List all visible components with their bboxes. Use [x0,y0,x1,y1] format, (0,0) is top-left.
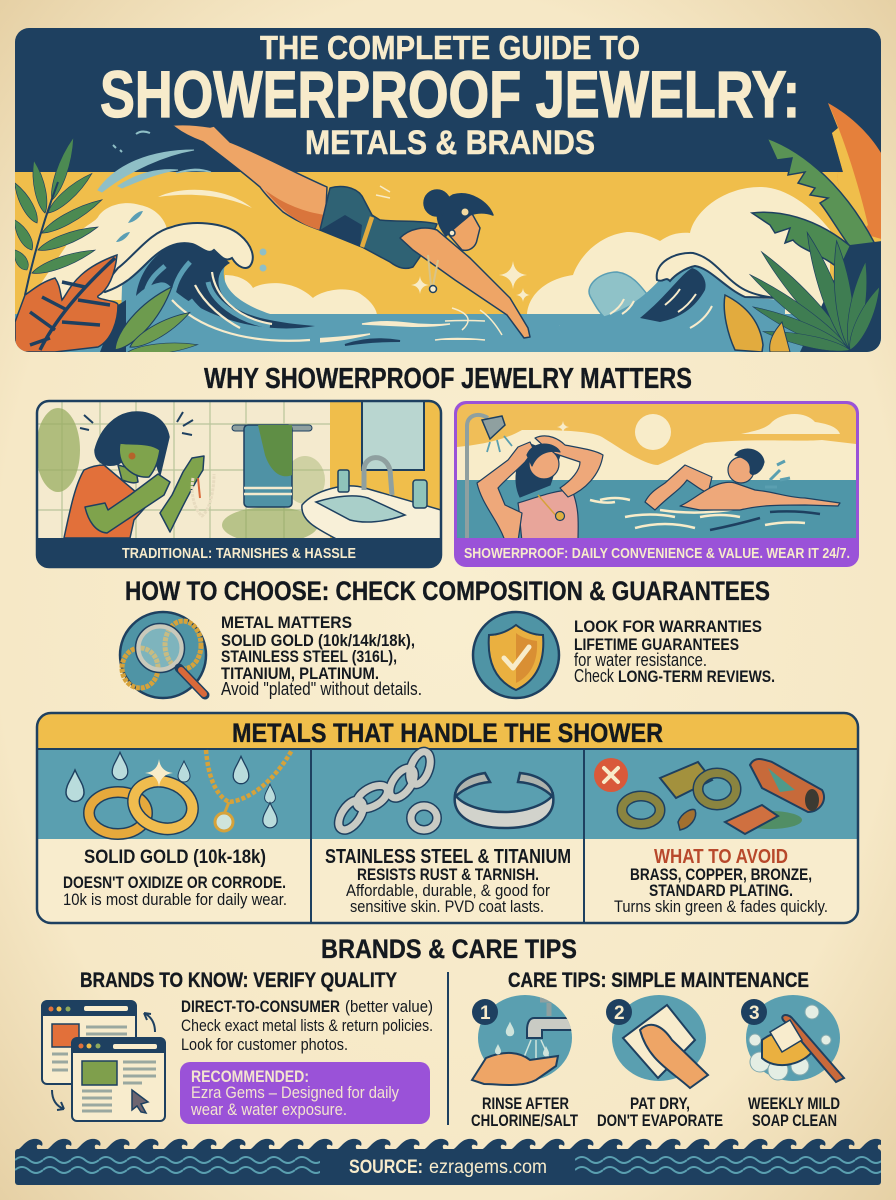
clouds behind waves [30,187,830,320]
source text: ezragems.com [429,1157,547,1178]
source text: SOURCE: [349,1157,423,1178]
mirror [362,401,424,470]
text: solid gold: 10k is most durable for daily wear. [63,890,287,909]
sparkles [376,186,530,335]
text block: metal matters [221,613,422,699]
text: stainless steel: STAINLESS STEEL & TITANIUM [325,846,571,868]
text block: warranties: Check [574,666,615,686]
care tip 3: soap clean [741,995,844,1082]
text: what to avoid [614,846,828,916]
caption: traditional: TRADITIONAL: TARNISHES & HASSLE [122,545,356,562]
title: METALS & BRANDS [305,124,595,162]
text block: metal matters: TITANIUM, PLATINUM. [221,664,379,683]
care labels: RINSE AFTER [482,1094,569,1113]
care labels [471,1094,840,1130]
metals heading: METALS THAT HANDLE THE SHOWER [232,718,663,748]
text block: direct to consumer: Look for customer photos. [181,1035,348,1054]
text block: warranties: LOOK FOR WARRANTIES [574,617,762,636]
icon: gold rings and necklace [66,750,292,836]
panel: showerproof [454,401,859,567]
icon: browser windows [42,1001,165,1121]
text block: warranties [574,617,775,686]
towel and rail [232,425,312,507]
text block: warranties: for water resistance. [574,650,707,670]
text block: direct to consumer [181,997,433,1054]
text block: direct to consumer: Check exact metal lists & return policies. [181,1016,433,1035]
care tip 2: pat dry: 2 [614,1003,625,1024]
callout: recommended: Ezra Gems – Designed for daily [191,1083,399,1102]
care labels: WEEKLY MILD [748,1094,840,1113]
icon: corroded metals with red cross [594,758,824,834]
text: stainless steel [325,846,571,916]
diver [172,125,530,338]
heading: why it matters: WHY SHOWERPROOF JEWELRY MATTERS [204,363,692,395]
left wave [98,132,320,352]
callout: recommended: wear & water exposure. [190,1100,347,1119]
man swimming [645,449,840,510]
left tropical leaves [10,135,198,357]
care tip 1: rinse [472,995,575,1085]
footer band [15,1138,881,1185]
text: solid gold: DOESN'T OXIDIZE OR CORRODE. [63,873,286,892]
text block: direct to consumer: DIRECT-TO-CONSUMER [181,997,340,1016]
title [100,29,800,162]
care labels: DON'T EVAPORATE [597,1111,723,1130]
icon: steel chain and cuff [334,749,553,834]
right wave [560,253,785,352]
care tip 1: rinse: 1 [480,1003,491,1024]
text: stainless steel: RESISTS RUST & TARNISH. [357,865,539,884]
text block: metal matters: Avoid "plated" without details. [221,679,422,699]
text block: metal matters: METAL MATTERS [221,613,352,632]
care labels: PAT DRY, [630,1094,690,1113]
right tropical leaves [724,103,890,356]
panel: traditional [36,401,441,567]
text block: metal matters: STAINLESS STEEL (316L), [221,647,397,666]
care labels: CHLORINE/SALT [471,1111,578,1130]
callout: recommended [180,1062,430,1124]
text block: direct to consumer: (better value) [345,997,433,1016]
care labels: SOAP CLEAN [752,1111,837,1130]
text: what to avoid: Turns skin green & fades quickly. [614,897,828,916]
text block: warranties: LIFETIME GUARANTEES [574,635,739,654]
panel: metals [37,713,858,923]
icon: guarantee shield [473,612,559,698]
sea [15,314,881,352]
callout: recommended: RECOMMENDED: [191,1067,309,1086]
subheading: brands: BRANDS TO KNOW: VERIFY QUALITY [80,969,397,992]
woman in shower [477,436,603,541]
text: solid gold: SOLID GOLD (10k-18k) [84,847,266,868]
hero banner [10,28,890,357]
sink [302,458,441,541]
heading: how to choose: HOW TO CHOOSE: CHECK COMPOSITION & GUARANTEES [125,576,770,606]
frustrated woman [64,412,214,538]
shower [467,415,512,541]
text: what to avoid: STANDARD PLATING. [649,881,793,900]
care tip 2: pat dry [606,995,708,1088]
text: stainless steel: sensitive skin. PVD coat lasts. [350,897,544,916]
text block: warranties: LONG-TERM REVIEWS. [618,667,775,686]
text: what to avoid: WHAT TO AVOID [654,846,788,868]
text: what to avoid: BRASS, COPPER, BRONZE, [630,865,812,884]
icon: magnifier over chains [120,612,206,698]
source text [349,1157,547,1178]
text: solid gold [63,847,287,909]
care tip 3: soap clean: 3 [749,1003,760,1024]
text block: metal matters: SOLID GOLD (10k/14k/18k), [221,631,415,650]
text: stainless steel: Affordable, durable, & good for [346,881,550,900]
title: THE COMPLETE GUIDE TO [260,29,640,66]
subheading: care: CARE TIPS: SIMPLE MAINTENANCE [508,969,809,992]
heading: brands and care: BRANDS & CARE TIPS [321,934,577,964]
